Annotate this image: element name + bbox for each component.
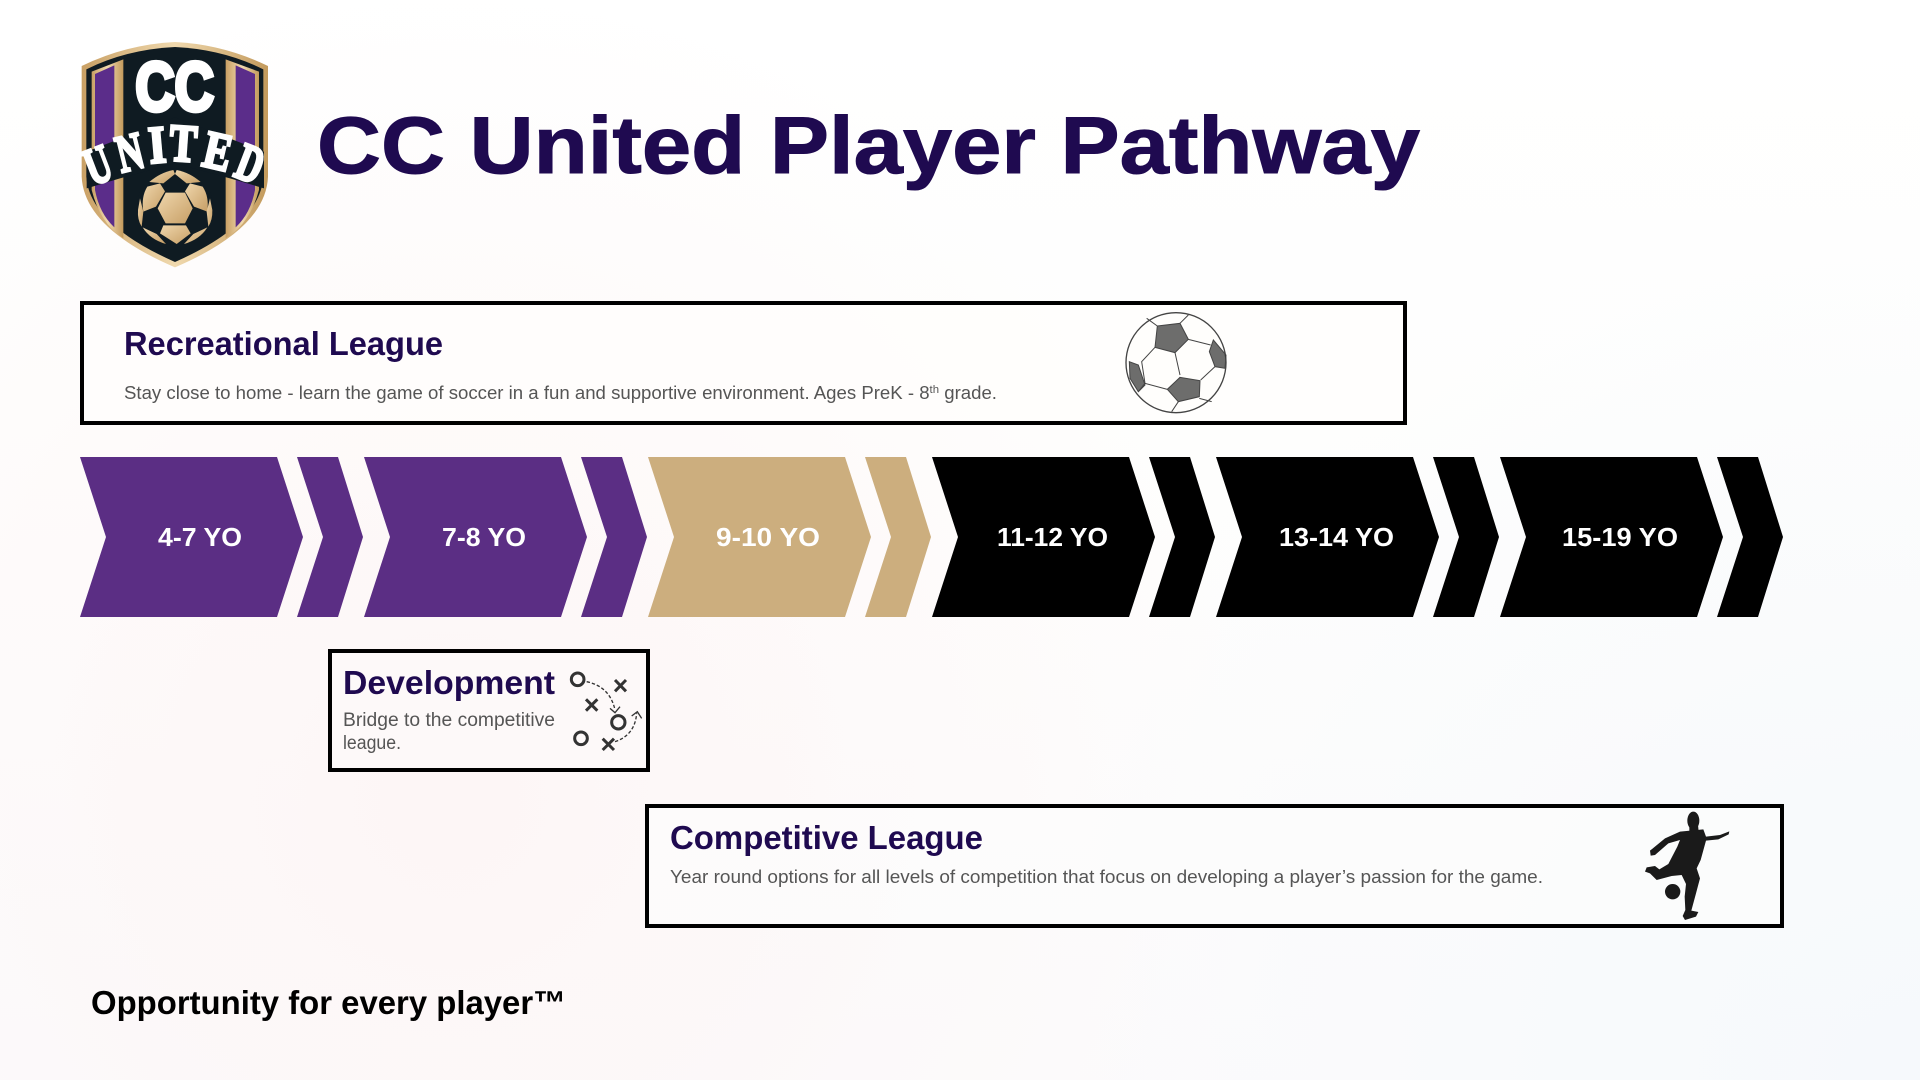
chevron: 9-10 YO	[648, 457, 931, 617]
chevron: 13-14 YO: 13-14 YO	[1279, 522, 1394, 552]
logo: CC United crest: D	[228, 131, 273, 196]
title: CC United Player Pathway	[317, 101, 1420, 191]
chevron: 9-10 YO: 9-10 YO	[716, 522, 820, 552]
panel: competitive league	[647, 806, 1782, 926]
heading: competitive league: Competitive League	[670, 819, 983, 856]
logo: CC United crest: I	[146, 116, 168, 175]
chevron: 4-7 YO: 4-7 YO	[158, 522, 242, 552]
text: recreational league description: grade.	[939, 383, 997, 403]
icon: player silhouette	[1645, 812, 1729, 920]
panel: development	[330, 651, 648, 770]
chevron row	[80, 457, 1783, 617]
text: recreational league description: th	[930, 384, 939, 396]
logo: CC United crest: E	[198, 121, 238, 183]
chevron: 15-19 YO: 15-19 YO	[1562, 522, 1678, 552]
text: development description: Bridge to the competitive	[343, 710, 555, 731]
logo: CC United crest	[75, 42, 273, 267]
chevron: 11-12 YO: 11-12 YO	[997, 522, 1108, 552]
logo: CC United crest: N	[110, 121, 149, 184]
logo: CC United crest: T	[167, 114, 199, 174]
text: recreational league description: Stay close to home - learn the game of soccer in a fun and supportive environment. Ages PreK - 8	[124, 383, 903, 403]
panel: recreational league	[82, 303, 1405, 423]
chevron: 4-7 YO	[80, 457, 363, 617]
chevron: 11-12 YO	[932, 457, 1215, 617]
logo: CC United crest: U	[75, 133, 120, 197]
icon: sketched soccer ball	[1126, 313, 1226, 413]
heading: recreational league: Recreational League	[124, 325, 443, 362]
text: development description: league.	[343, 733, 401, 754]
icon: tactics board	[571, 673, 642, 750]
heading: development: Development	[343, 664, 555, 701]
text: competitive league description: Year round options for all levels of competition that focus on developing a player’s passion for the game.	[670, 867, 1543, 887]
chevron: 15-19 YO	[1500, 457, 1783, 617]
logo: CC United crest: CC	[135, 49, 214, 126]
chevron: 7-8 YO	[364, 457, 647, 617]
chevron: 7-8 YO: 7-8 YO	[442, 522, 526, 552]
tagline: Opportunity for every player™	[91, 984, 566, 1021]
chevron: 13-14 YO	[1216, 457, 1499, 617]
